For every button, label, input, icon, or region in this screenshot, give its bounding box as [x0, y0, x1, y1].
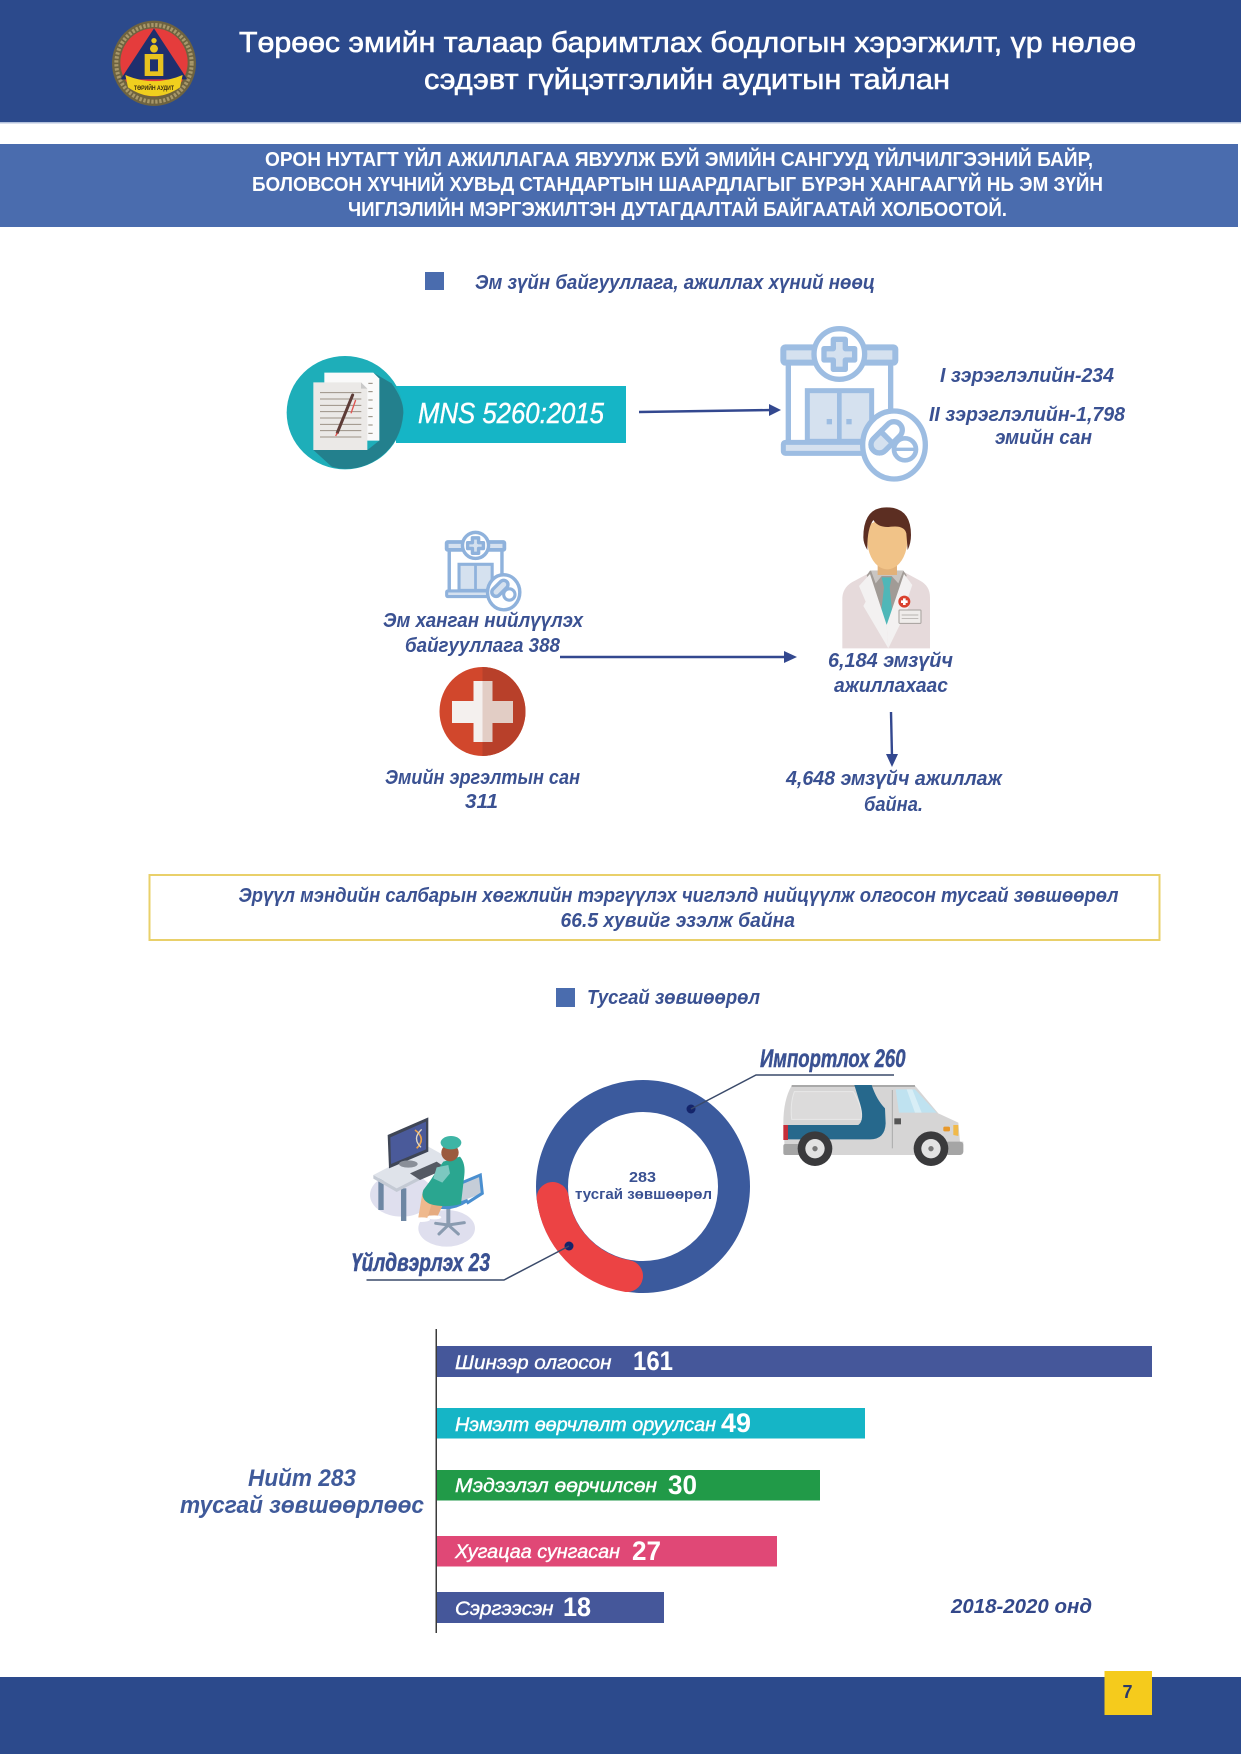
bar chart: licence types — [180, 1329, 1152, 1633]
bar: info changed 30: Мэдээлэл өөрчилсөн — [455, 1476, 658, 1497]
bar: extended 27: Хугацаа сунгасан — [454, 1542, 621, 1563]
pharmacy counts text — [929, 365, 1126, 449]
header band — [0, 0, 1241, 124]
label: distributors 388: Эм ханган нийлүүлэх — [383, 610, 584, 632]
label: revolving fund 311 — [385, 767, 580, 813]
period note: 2018-2020 онд — [950, 1596, 1092, 1618]
icon: van — [783, 1085, 963, 1166]
standard badge: MNS 5260:2015 — [287, 356, 626, 469]
emblem caption: ТӨРИЙН АУДИТ — [134, 83, 174, 92]
bar: new 161 — [437, 1346, 1152, 1377]
title — [239, 27, 1136, 96]
key finding banner: ЧИГЛЭЛИЙН МЭРГЭЖИЛТЭН ДУТАГДАЛТАЙ БАЙГААТАЙ ХОЛБООТОЙ. — [348, 197, 1007, 221]
page number: 7 — [1122, 1682, 1133, 1702]
icon: document and pen — [287, 356, 403, 469]
title: сэдэвт гүйцэтгэлийн аудитын тайлан — [424, 64, 950, 96]
donut centre label — [575, 1169, 712, 1203]
callout: manufacture 23 — [351, 1242, 574, 1280]
icon: lab worker at computer — [370, 1117, 482, 1247]
icon: pharmacy large — [783, 329, 925, 479]
page number — [1104, 1671, 1152, 1715]
bar: info changed 30: 30 — [668, 1470, 697, 1500]
bar: restored 18 — [437, 1592, 664, 1623]
icon: pharmacist — [842, 507, 930, 648]
key finding banner: БОЛОВСОН ХҮЧНИЙ ХУВЬД СТАНДАРТЫН ШААРДЛАГЫГ БҮРЭН ХАНГААГҮЙ НЬ ЭМ ЗҮЙН — [252, 172, 1103, 196]
pharmacy counts text: I зэрэглэлийн-234 — [940, 365, 1114, 387]
callout: 66.5 percent: 66.5 хувийг эзэлж байна — [560, 910, 795, 932]
icon: red cross — [440, 667, 526, 756]
arrow: down to working pharmacists — [886, 712, 898, 767]
section heading: special licences: Тусгай зөвшөөрөл — [587, 987, 761, 1009]
arrow: standard to pharmacy — [639, 404, 781, 416]
bar: amended 49 — [437, 1408, 865, 1438]
chart title: тусгай зөвшөөрлөөс — [180, 1492, 424, 1519]
pharmacy counts text: II зэрэглэлийн-1,798 — [929, 404, 1126, 426]
callout: 66.5 percent: Эрүүл мэндийн салбарын хөгжлийн тэргүүлэх чиглэлд нийцүүлж олгосон тусгай зөвшөөрөл — [238, 885, 1119, 907]
key finding banner: ОРОН НУТАГТ ҮЙЛ АЖИЛЛАГАА ЯВУУЛЖ БУЙ ЭМИЙН САНГУУД ҮЙЛЧИЛГЭЭНИЙ БАЙР, — [265, 147, 1093, 171]
donut centre label: тусгай зөвшөөрөл — [575, 1186, 712, 1203]
label: 4,648 working: 4,648 эмзүйч ажиллаж — [785, 768, 1003, 790]
label: 6,184 pharmacists needed — [828, 650, 953, 697]
bar: info changed 30 — [437, 1470, 820, 1500]
label: distributors 388: байгууллага 388 — [405, 635, 561, 657]
standard code label: MNS 5260:2015 — [418, 398, 605, 430]
donut segment: manufacturing — [553, 1198, 627, 1276]
pharmacy counts text: эмийн сан — [995, 427, 1092, 449]
label: 4,648 working — [785, 768, 1003, 816]
arrow: organisations to pharmacists — [560, 651, 797, 663]
bar: extended 27 — [437, 1536, 777, 1566]
callout: import 260: Импортлох 260 — [760, 1045, 906, 1073]
bar: new 161: Шинээр олгосон — [455, 1353, 612, 1374]
section heading: pharma organisations and staff: Эм зүйн байгууллага, ажиллах хүний нөөц — [475, 272, 875, 294]
label: revolving fund 311: 311 — [465, 791, 498, 813]
bar: restored 18: 18 — [563, 1592, 591, 1622]
callout: manufacture 23: Үйлдвэрлэх 23 — [351, 1249, 490, 1277]
bar: amended 49: 49 — [721, 1408, 751, 1438]
label: revolving fund 311: Эмийн эргэлтын сан — [385, 767, 580, 789]
donut centre label: 283 — [629, 1169, 656, 1186]
icon: pharmacy small — [447, 532, 520, 610]
bar: new 161: 161 — [633, 1346, 673, 1376]
label: 6,184 pharmacists needed: 6,184 эмзүйч — [828, 650, 953, 672]
callout: import 260 — [686, 1045, 906, 1114]
bar: restored 18: Сэргээсэн — [455, 1599, 554, 1620]
chart title — [180, 1465, 424, 1519]
label: 4,648 working: байна. — [864, 794, 923, 816]
label: 6,184 pharmacists needed: ажиллахаас — [834, 675, 948, 697]
callout: 66.5 percent — [150, 875, 1160, 940]
chart title: Нийт 283 — [248, 1465, 357, 1492]
emblem: audit office logo — [112, 21, 196, 106]
title: Төрөөс эмийн талаар баримтлах бодлогын хэрэгжилт, үр нөлөө — [239, 27, 1136, 59]
label: distributors 388 — [383, 610, 584, 657]
footer band — [0, 1677, 1241, 1754]
bar: amended 49: Нэмэлт өөрчлөлт оруулсан — [455, 1415, 717, 1436]
key finding banner — [0, 144, 1238, 227]
bar: extended 27: 27 — [632, 1536, 661, 1566]
donut chart: licences — [552, 1096, 734, 1277]
